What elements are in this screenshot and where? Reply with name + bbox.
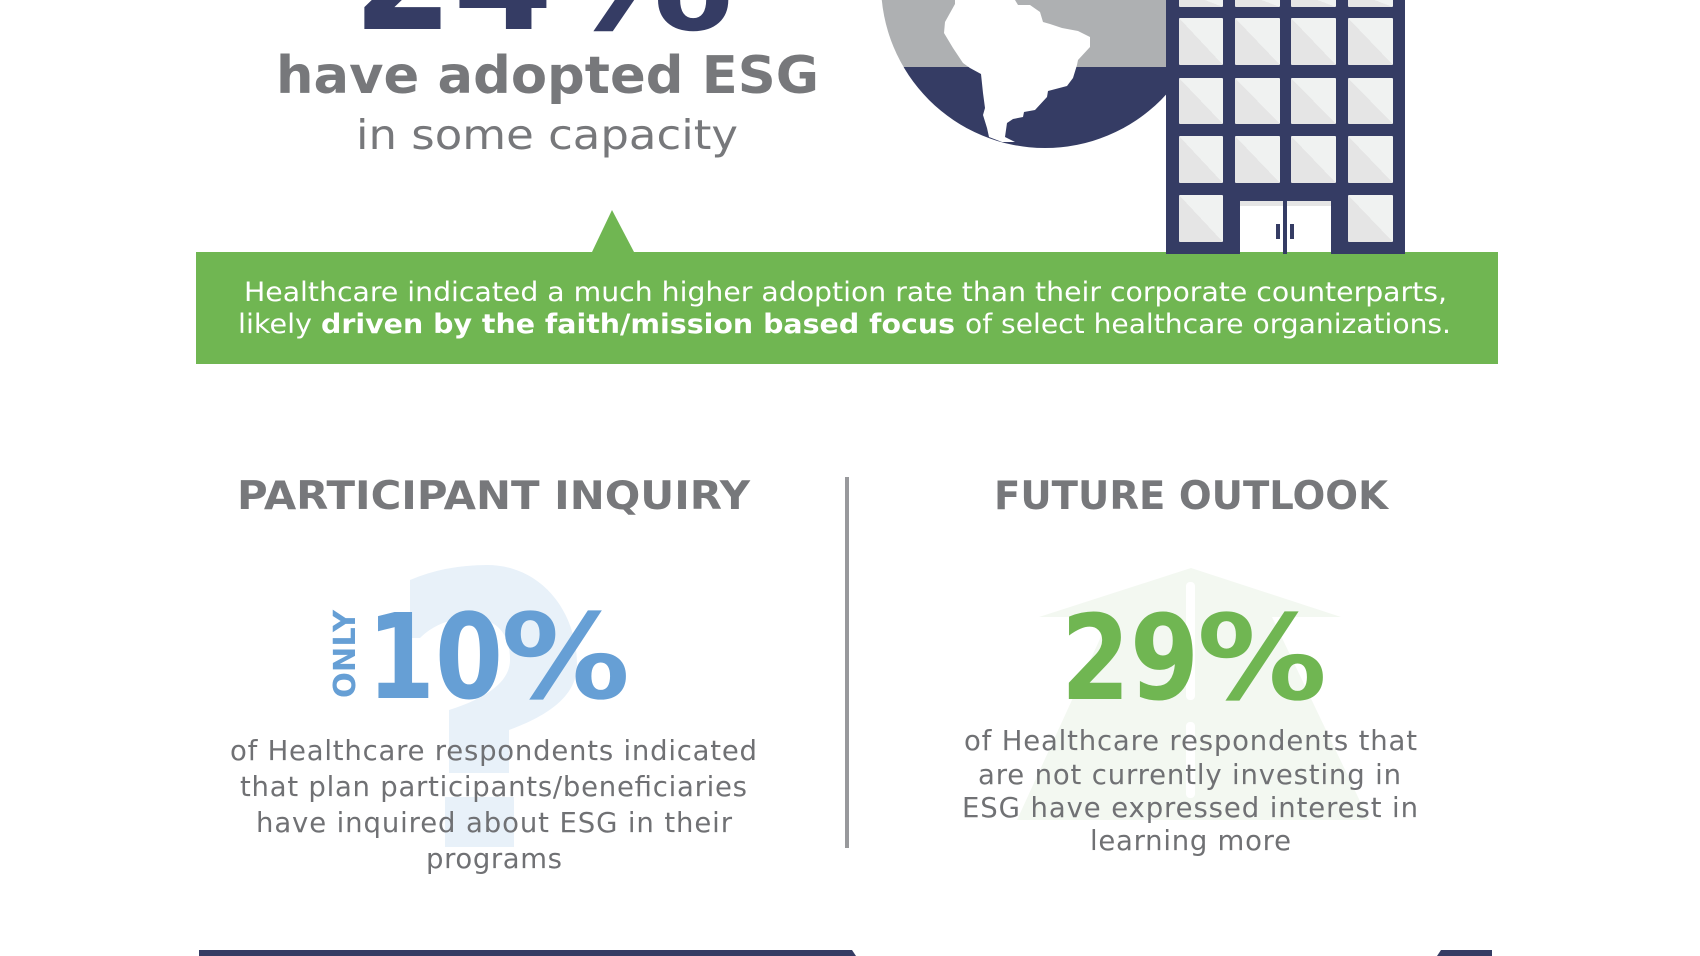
description: future outlook: learning more <box>1090 825 1291 857</box>
description: participant inquiry: have inquired about ESG in their <box>256 807 733 839</box>
stat: 10%: % <box>501 588 630 726</box>
icon: faint question mark <box>410 565 577 847</box>
description: future outlook: are not currently investing in <box>978 759 1401 791</box>
callout: green band with pointer <box>196 210 1498 364</box>
description: participant inquiry <box>230 735 757 875</box>
description: future outlook: of Healthcare respondents that <box>964 725 1417 757</box>
description: participant inquiry: programs <box>426 843 562 875</box>
bottom banner left segment <box>199 950 856 956</box>
stat: 29% <box>1061 589 1327 727</box>
heading: participant inquiry: PARTICIPANT INQUIRY <box>237 473 750 519</box>
description: participant inquiry: of Healthcare respondents indicated <box>230 735 757 767</box>
heading: 24% have adopted ESG in some capacity <box>276 0 819 159</box>
callout line 2: of select healthcare organizations. <box>965 309 1451 340</box>
rotated label: only: ONLY <box>328 609 363 698</box>
panel: participant inquiry <box>230 473 757 875</box>
heading: future outlook: FUTURE OUTLOOK <box>994 473 1389 519</box>
stat: 29%: 29 <box>1061 589 1199 727</box>
have adopted ESG: have adopted ESG <box>276 46 819 106</box>
icon: office building <box>1166 0 1405 254</box>
stat: 29%: % <box>1197 589 1327 727</box>
bottom banner right segment <box>1437 950 1492 956</box>
callout band <box>196 252 1498 364</box>
callout line 2: driven by the faith/mission based focus <box>321 309 955 340</box>
panel: future outlook <box>962 473 1418 857</box>
callout line 2 <box>238 309 1451 340</box>
stat: 10% <box>367 588 630 726</box>
callout pointer <box>592 210 634 252</box>
big number 24% <box>353 0 734 67</box>
callout line 2: likely <box>238 309 312 340</box>
building doors <box>1240 201 1331 254</box>
divider <box>845 477 849 848</box>
icon: globe showing South America <box>870 0 1166 157</box>
stat: 10%: 10 <box>367 588 503 726</box>
icon: faint upward road arrow <box>1017 568 1369 820</box>
in some capacity: in some capacity <box>356 111 738 159</box>
description: participant inquiry: that plan participants/beneficiaries <box>240 771 747 803</box>
description: future outlook: ESG have expressed interest in <box>962 792 1418 824</box>
description: future outlook <box>962 725 1418 857</box>
callout line 1: Healthcare indicated a much higher adoption rate than their corporate counterparts, <box>244 277 1447 308</box>
